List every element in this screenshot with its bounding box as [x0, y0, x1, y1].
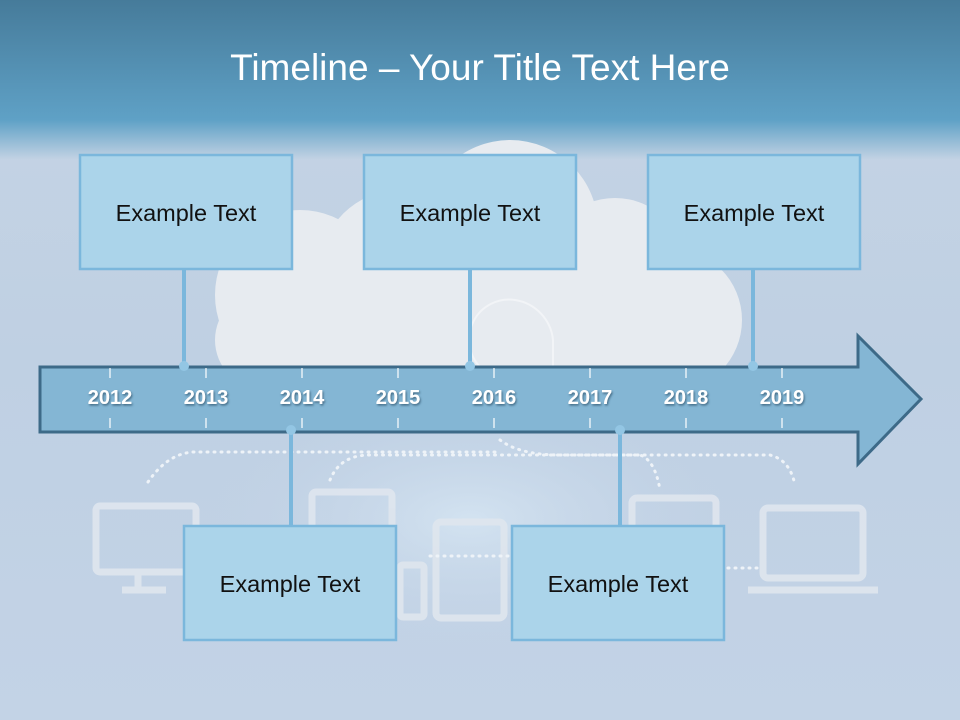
timeline arrow — [40, 336, 921, 464]
text box 1 — [80, 155, 292, 269]
year labels: 2018 — [664, 387, 708, 409]
year labels: 2013 — [184, 387, 228, 409]
tick marks — [110, 368, 782, 428]
year labels — [88, 387, 804, 409]
year labels: 2016 — [472, 387, 516, 409]
connectors — [179, 268, 758, 528]
cloud illustration — [215, 140, 742, 392]
year labels: 2019 — [760, 387, 804, 409]
devices illustration — [96, 492, 878, 618]
text box 1: Example Text — [116, 200, 257, 226]
dotted network lines — [148, 440, 795, 568]
header bar — [0, 0, 960, 160]
text box 5 — [512, 526, 724, 640]
text box 4: Example Text — [220, 571, 361, 597]
text box 3 — [648, 155, 860, 269]
text box 4 — [184, 526, 396, 640]
year labels: 2017 — [568, 387, 612, 409]
year labels: 2012 — [88, 387, 132, 409]
year labels: 2015 — [376, 387, 420, 409]
text box 2: Example Text — [400, 200, 541, 226]
text box 2 — [364, 155, 576, 269]
year labels: 2014 — [280, 387, 325, 409]
title: Timeline – Your Title Text Here — [230, 47, 730, 88]
text box 3: Example Text — [684, 200, 825, 226]
text box 5: Example Text — [548, 571, 689, 597]
